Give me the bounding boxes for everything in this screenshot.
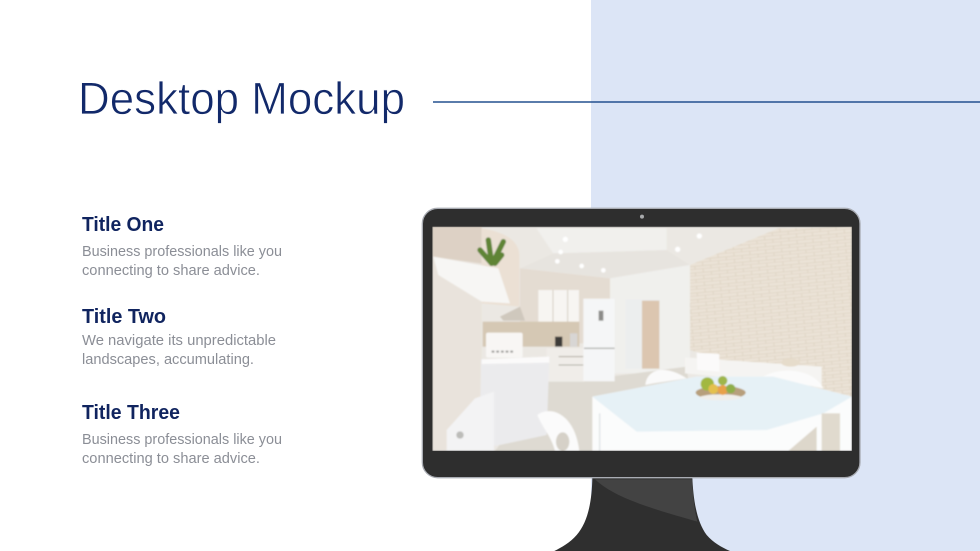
- backsplash: [483, 322, 579, 347]
- kettle and appliances: [555, 337, 562, 347]
- text block: title three: Business professionals like you: [82, 431, 282, 448]
- brick wall: [690, 227, 852, 400]
- counter island: [480, 357, 549, 446]
- doorway: [626, 299, 660, 369]
- desktop monitor mockup: [422, 208, 860, 551]
- text block: title two: [82, 306, 276, 368]
- monitor body: [422, 208, 860, 478]
- fruit bowl: [696, 386, 746, 399]
- chairs: [645, 370, 687, 385]
- text block: title one: [82, 214, 282, 279]
- lower cabinets: [552, 378, 584, 382]
- ceiling spotlights: [555, 233, 702, 273]
- text block: title two: landscapes, accumulating.: [82, 351, 254, 368]
- ceiling: [432, 227, 852, 451]
- floor: [495, 367, 697, 451]
- table: [592, 396, 852, 451]
- plant: [480, 240, 503, 263]
- text block: title three: [82, 402, 282, 467]
- shelf and hood: [433, 257, 510, 303]
- fridge: [583, 299, 615, 381]
- text block: title two: We navigate its unpredictable: [82, 332, 276, 349]
- text block: title three: Title Three: [82, 402, 180, 424]
- title: Desktop Mockup: [78, 73, 405, 124]
- background panel: light blue: [591, 0, 980, 551]
- sofa: [685, 357, 822, 387]
- microwave: [486, 333, 523, 358]
- monitor stand: [554, 477, 730, 551]
- radiator: [447, 392, 494, 451]
- back wall: [610, 265, 690, 373]
- text block: title one: Business professionals like you: [82, 243, 282, 260]
- webcam: [640, 215, 644, 219]
- text block: title one: connecting to share advice.: [82, 262, 260, 279]
- text block: title two: Title Two: [82, 306, 166, 328]
- title rule line: [433, 101, 980, 103]
- text block: title one: Title One: [82, 214, 164, 236]
- left wall: [432, 259, 433, 260]
- upper cabinets: [538, 290, 579, 322]
- text block: title three: connecting to share advice.: [82, 450, 260, 467]
- screen photo: white kitchen: [432, 227, 852, 451]
